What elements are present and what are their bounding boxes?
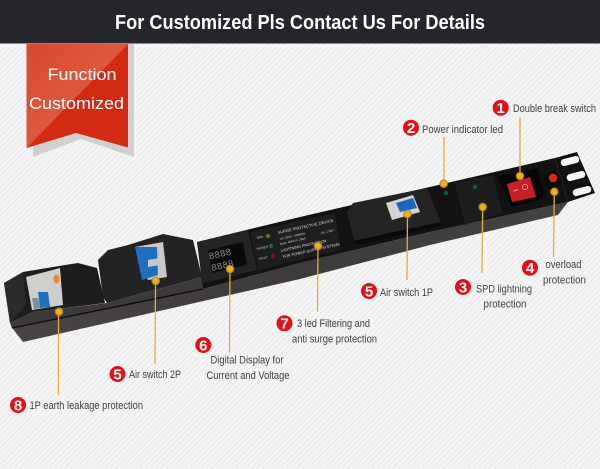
label 3: SPD lightning protection: SPD lightning: [476, 284, 532, 296]
label 6: digital display: 6: [199, 337, 207, 354]
label 5: air switch 1P: 5: [365, 283, 373, 300]
label 5: air switch 2P: 5: [113, 366, 122, 383]
surge panel: FOR POWER SUPPLY SYSTEMS: [282, 242, 341, 259]
digital display: 8888: [208, 247, 233, 262]
label 8: earth leakage: 8: [14, 397, 22, 414]
label 4: overload protection: [522, 259, 586, 286]
surge panel: FAULT: [258, 255, 268, 261]
power LED: [444, 191, 448, 195]
label 5: air switch 1P: [361, 283, 433, 300]
surge panel: [250, 213, 341, 270]
label 7: led filtering: 3 led Filtering and: [297, 318, 370, 330]
label 2: power indicator led: [403, 120, 503, 137]
label 2: power indicator led: 2: [407, 120, 415, 137]
ribbon badge: Function Customized: [26, 44, 134, 157]
earth leakage cover: [4, 263, 105, 323]
surge panel: LIGHTNING PROTECTION: [280, 239, 327, 253]
label 4: overload protection: overload: [546, 259, 582, 271]
power distribution unit: [4, 152, 595, 342]
surge panel: SPD: [256, 235, 264, 240]
lower band under covers: [10, 277, 203, 328]
header bar: [0, 0, 600, 44]
digital display: 8888: [210, 258, 235, 274]
surge panel: Up: 1.5kV: [320, 228, 334, 235]
overload button: [543, 171, 561, 189]
ribbon badge: Function Customized: Customized: [29, 94, 124, 113]
digital display: [197, 230, 257, 283]
label 3: SPD lightning protection: [455, 279, 532, 310]
label 8: earth leakage: 1P earth leakage protection: [30, 400, 143, 412]
mounting flange: [555, 152, 595, 202]
rocker switch: [497, 168, 545, 207]
header title: For Customized Pls Contact Us For Details: [115, 12, 485, 34]
body side face: [10, 202, 568, 342]
faceplate: [197, 158, 568, 289]
label 6: digital display: Digital Display for: [210, 354, 284, 366]
label 5: air switch 2P: Air switch 2P: [129, 369, 181, 381]
air switch 1P cover: [347, 188, 442, 245]
label 1: double break switch: 1: [497, 100, 505, 117]
label 7: led filtering: 7: [280, 316, 289, 333]
label 3: SPD lightning protection: protection: [484, 298, 526, 310]
surge panel: Imax: 40kA In: 20kA: [279, 236, 306, 246]
SPD plate: [455, 175, 502, 225]
surge panel: SURGE PROTECTIVE DEVICE: [277, 218, 334, 235]
label 3: SPD lightning protection: 3: [459, 279, 467, 296]
surge panel: POWER: [256, 244, 269, 251]
label 4: overload protection: 4: [526, 260, 535, 277]
ribbon badge: Function Customized: Function: [48, 65, 116, 84]
label 7: led filtering: [276, 315, 377, 346]
label 5: air switch 2P: [110, 366, 181, 383]
label 8: earth leakage: [10, 397, 143, 414]
label 6: digital display: [195, 337, 290, 382]
label 4: overload protection: protection: [543, 274, 586, 286]
label 5: air switch 1P: Air switch 1P: [380, 287, 433, 299]
label 7: led filtering: anti surge protection: [292, 334, 377, 346]
label 2: power indicator led: Power indicator led: [422, 124, 503, 136]
surge panel: Un: 220V~ 50/60Hz: [279, 231, 306, 241]
callout leader lines: [58, 117, 554, 395]
label 1: double break switch: [493, 100, 596, 117]
label 6: digital display: Current and Voltage: [206, 370, 290, 382]
air switch 2P cover: [98, 234, 202, 303]
callout marker dots: [55, 172, 558, 315]
